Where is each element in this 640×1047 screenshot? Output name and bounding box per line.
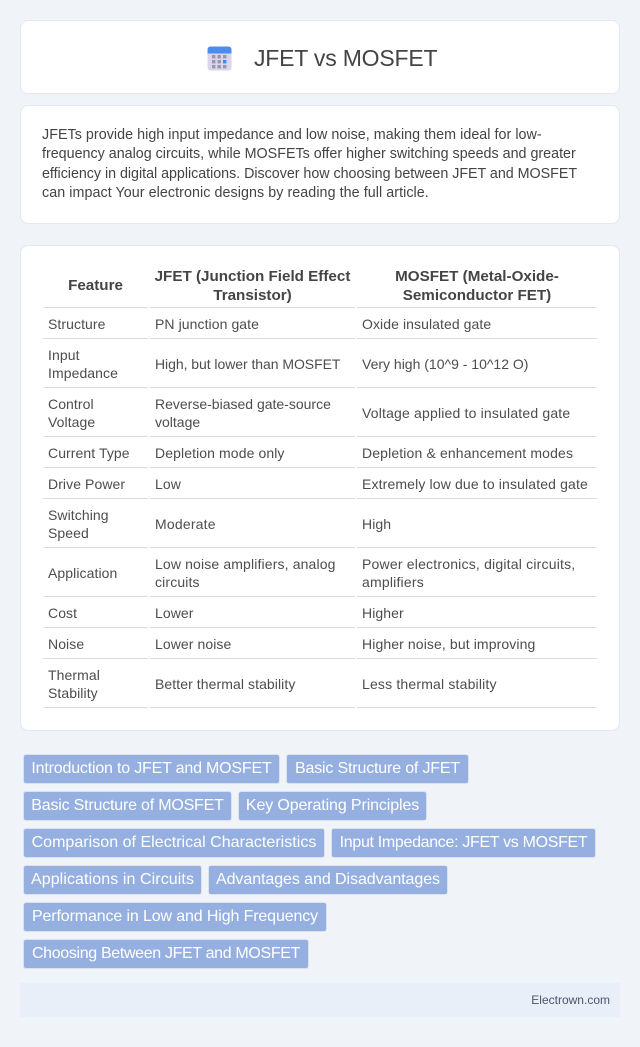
table rows: Low noise amplifiers, analog	[155, 556, 336, 572]
table rows: Structure	[48, 316, 106, 332]
intro card	[20, 105, 620, 224]
table rows: Moderate	[155, 516, 216, 532]
table rows: Impedance	[48, 365, 118, 381]
table rows: amplifiers	[362, 574, 424, 590]
topic tags: Basic Structure of JFET	[295, 760, 460, 777]
table rows: Thermal	[48, 667, 100, 683]
topic tags: Input Impedance: JFET vs MOSFET	[340, 834, 587, 851]
topic tags: Key Operating Principles	[246, 797, 419, 814]
table header: Transistor)	[213, 287, 292, 304]
topic tags: Comparison of Electrical Characteristics	[32, 834, 316, 851]
topic tags: Applications in Circuits	[31, 871, 194, 888]
footer credit: Electrown.com	[531, 993, 610, 1007]
table rows: PN junction gate	[155, 316, 259, 332]
table rows: Extremely low due to insulated gate	[362, 476, 588, 492]
table header: Semiconductor FET)	[403, 287, 551, 304]
title: JFET vs MOSFET	[254, 45, 437, 71]
table rows: Very high (10^9 - 10^12 O)	[362, 356, 528, 372]
table rows: Depletion & enhancement modes	[362, 445, 573, 461]
table rows: voltage	[155, 414, 200, 430]
table rows: Lower noise	[155, 636, 231, 652]
table rows: Lower	[155, 605, 194, 621]
table rows: Drive Power	[48, 476, 125, 492]
header card	[20, 20, 620, 94]
table rows: Cost	[48, 605, 77, 621]
intro text: can impact Your electronic designs by reading the full article.	[42, 185, 429, 201]
intro text: efficiency in digital applications. Discover how choosing between JFET and MOSFET	[42, 166, 577, 182]
table rows: Power electronics, digital circuits,	[362, 556, 575, 572]
table rows: Higher noise, but improving	[362, 636, 535, 652]
table rows: Less thermal stability	[362, 676, 497, 692]
intro text: frequency analog circuits, while MOSFETs offer higher switching speeds and greater	[42, 146, 576, 162]
table header: MOSFET (Metal-Oxide-	[395, 268, 559, 285]
icon: calendar	[208, 46, 232, 70]
table rows: Control	[48, 396, 94, 412]
table rows: Voltage applied to insulated gate	[362, 405, 570, 421]
table rows: Stability	[48, 685, 98, 701]
table rows: Low	[155, 476, 181, 492]
topic tags: Basic Structure of MOSFET	[31, 797, 224, 814]
table rows: High, but lower than MOSFET	[155, 356, 340, 372]
table header: JFET (Junction Field Effect	[155, 268, 350, 285]
table rows: Input	[48, 347, 80, 363]
topic tags: Choosing Between JFET and MOSFET	[32, 945, 300, 962]
table rows: Speed	[48, 525, 89, 541]
table rows: Higher	[362, 605, 404, 621]
table header: Feature	[68, 277, 123, 294]
table rows: Voltage	[48, 414, 95, 430]
table header	[68, 268, 559, 304]
comparison table panel	[20, 245, 620, 731]
topic tags	[23, 754, 596, 969]
topic tags: Performance in Low and High Frequency	[32, 908, 318, 925]
table rows	[43, 307, 597, 708]
topic tags: Introduction to JFET and MOSFET	[31, 760, 272, 777]
table rows: Application	[48, 565, 117, 581]
table rows: Current Type	[48, 445, 130, 461]
table rows: circuits	[155, 574, 200, 590]
table rows: Switching	[48, 507, 109, 523]
table rows: Depletion mode only	[155, 445, 285, 461]
table rows: High	[362, 516, 391, 532]
table rows: Better thermal stability	[155, 676, 295, 692]
intro text: JFETs provide high input impedance and low noise, making them ideal for low-	[42, 127, 542, 143]
table rows: Reverse-biased gate-source	[155, 396, 331, 412]
table rows: Noise	[48, 636, 84, 652]
table rows: Oxide insulated gate	[362, 316, 491, 332]
intro text	[42, 127, 577, 201]
topic tags: Advantages and Disadvantages	[216, 871, 440, 888]
footer	[20, 983, 620, 1017]
